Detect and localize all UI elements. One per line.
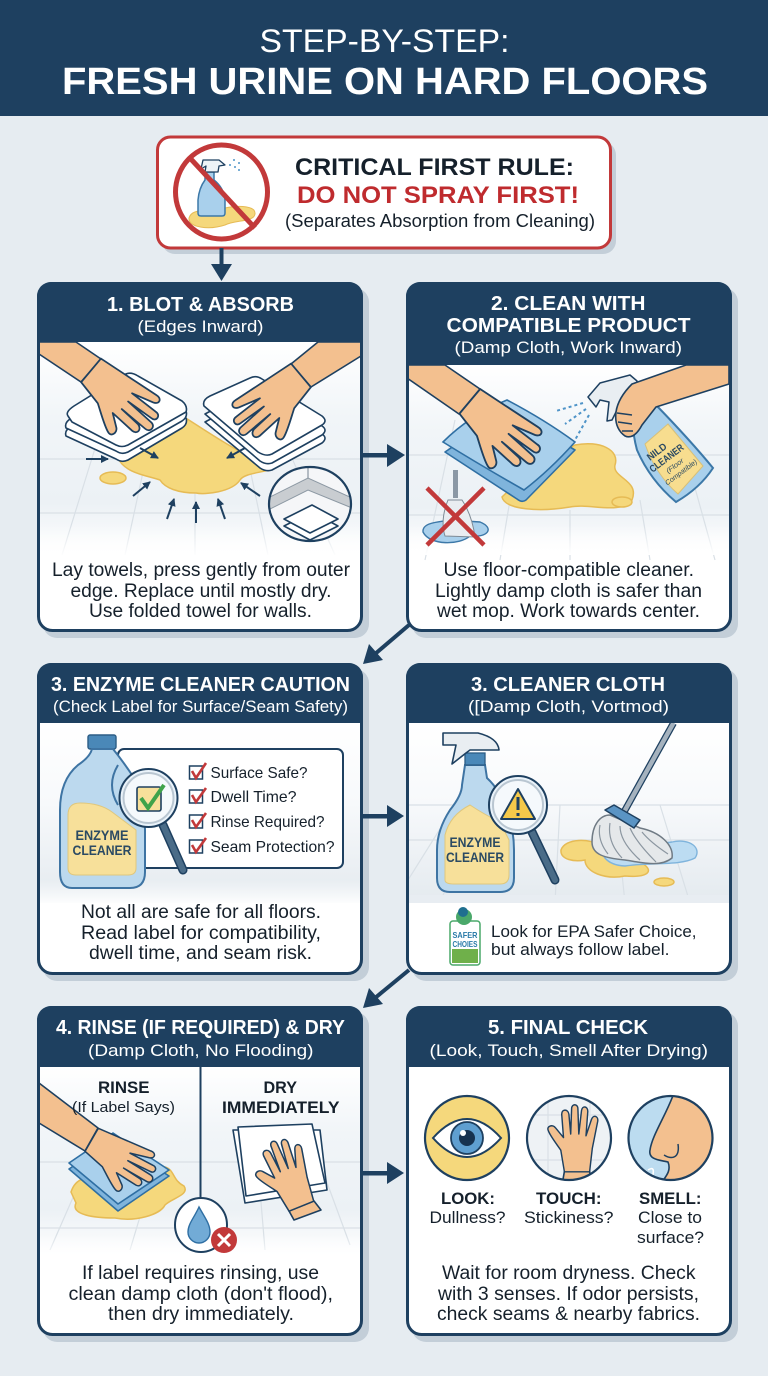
body text: Use folded towel for walls. (89, 601, 312, 622)
touch label (524, 1189, 614, 1227)
card background (43, 288, 369, 638)
floor background (39, 1067, 361, 1260)
panel: step 5 final check (406, 1006, 738, 1342)
note text (491, 922, 696, 959)
arrow: step 2 to step 3 (363, 625, 409, 664)
spray bottle: mild cleaner: NILD (645, 441, 669, 463)
smell label: surface? (637, 1228, 704, 1247)
enzyme cleaner jug: ENZYME (76, 827, 128, 843)
header (37, 282, 363, 342)
spray bottle: mild cleaner: (Floor (665, 457, 686, 475)
header: (Damp Cloth, No Flooding) (88, 1041, 314, 1060)
header (37, 1006, 363, 1067)
body text: with 3 senses. If odor persists, (437, 1284, 699, 1305)
arrow: cleaner cloth to step 4 (363, 970, 409, 1008)
header (37, 663, 363, 723)
arrow: step 4 to step 5 (363, 1162, 404, 1184)
smell label: Close to (638, 1208, 702, 1227)
checklist items: Dwell Time? (210, 789, 297, 806)
header: (Check Label for Surface/Seam Safety) (53, 697, 348, 716)
rinse label: RINSE (98, 1078, 150, 1097)
header: (Edges Inward) (138, 317, 264, 336)
rinse illustration (39, 1083, 185, 1219)
rinse label (72, 1078, 175, 1116)
header: 4. RINSE (IF REQUIRED) & DRY (56, 1017, 346, 1039)
card background (412, 288, 738, 638)
spray bottle: mild cleaner: Compatible) (664, 459, 699, 487)
illustration: bottle and mop (408, 723, 730, 903)
body text: Use floor-compatible cleaner. (444, 560, 694, 581)
callout: critical first rule: CRITICAL FIRST RULE: (295, 154, 574, 181)
smell label: SMELL: (639, 1189, 702, 1208)
card background (412, 669, 738, 981)
enzyme cleaner jug (60, 735, 145, 888)
header: (Look, Touch, Smell After Drying) (430, 1041, 708, 1060)
spray bottle: ENZYME (450, 834, 500, 850)
note text: but always follow label. (491, 940, 670, 959)
card background (412, 1012, 738, 1342)
icon: nose (627, 1094, 714, 1182)
panel: step 1 blot and absorb (37, 282, 369, 638)
icon: safer choice label (450, 907, 480, 965)
spray mist (556, 403, 589, 440)
title banner (0, 0, 768, 116)
callout: critical first rule (158, 137, 616, 254)
crossed-out wet mop (423, 470, 488, 545)
dry illustration (233, 1124, 327, 1220)
body text (68, 1263, 333, 1325)
icon: safer choice label: SAFER (452, 930, 478, 940)
arrow: step 3 to cleaner cloth (363, 805, 404, 827)
hand holding bottle (616, 365, 729, 437)
header: (Damp Cloth, Work Inward) (454, 338, 682, 357)
body text (435, 560, 702, 622)
arrow: step 1 to step 2 (363, 444, 405, 467)
mop (592, 723, 674, 864)
body text (437, 1263, 700, 1325)
look label (430, 1189, 506, 1227)
body text (81, 902, 321, 964)
header: ([Damp Cloth, Vortmod) (468, 697, 669, 716)
header: 3. ENZYME CLEANER CAUTION (51, 674, 350, 696)
body text: dwell time, and seam risk. (89, 943, 312, 964)
header (406, 663, 732, 723)
divider (200, 1067, 202, 1198)
body text: Lay towels, press gently from outer (52, 560, 351, 581)
body text: Read label for compatibility, (81, 923, 321, 944)
illustration: towels blotting puddle (39, 342, 361, 557)
panel: step 4 rinse and dry (37, 1006, 369, 1342)
dry label (222, 1078, 340, 1117)
panel: step 2 clean with compatible product (406, 282, 738, 638)
panel: step 3 enzyme cleaner caution (37, 663, 369, 981)
icon: touching hand (527, 1096, 611, 1185)
checklist items: Seam Protection? (210, 839, 335, 856)
body text (52, 560, 351, 622)
checklist items (190, 763, 335, 856)
inward arrows (86, 448, 260, 523)
card background (43, 1012, 369, 1342)
hand on cloth (407, 365, 553, 487)
spray bottle: mild cleaner (588, 375, 713, 502)
header (406, 1006, 732, 1067)
look label: Dullness? (430, 1208, 506, 1227)
title banner: STEP-BY-STEP: (260, 23, 510, 59)
header: 5. FINAL CHECK (488, 1017, 649, 1039)
card background (43, 669, 369, 981)
icon: eye (425, 1096, 509, 1180)
magnifier with green check (120, 769, 183, 870)
touch label: TOUCH: (536, 1189, 602, 1208)
panel: cleaner cloth (406, 663, 738, 981)
body text: If label requires rinsing, use (82, 1263, 319, 1284)
header: COMPATIBLE PRODUCT (446, 315, 690, 337)
left hand (39, 342, 170, 453)
body text: check seams & nearby fabrics. (437, 1304, 700, 1325)
note text: Look for EPA Safer Choice, (491, 922, 696, 941)
rinse label: (If Label Says) (72, 1099, 175, 1116)
body text: wet mop. Work towards center. (436, 601, 700, 622)
enzyme cleaner jug: CLEANER (72, 842, 132, 858)
arrow: rule to step 1 (211, 248, 232, 281)
inset: folded towel at wall (268, 460, 352, 541)
body text: Wait for room dryness. Check (442, 1263, 696, 1284)
body text: edge. Replace until mostly dry. (70, 581, 332, 602)
checklist items: Surface Safe? (210, 765, 308, 782)
body text: Lightly damp cloth is safer than (435, 581, 702, 602)
spray bottle: CLEANER (446, 849, 504, 865)
dry label: DRY (264, 1078, 298, 1097)
header: 3. CLEANER CLOTH (471, 674, 665, 696)
dry label: IMMEDIATELY (222, 1098, 340, 1117)
smell label (637, 1189, 704, 1247)
left towel stack (66, 373, 186, 461)
icon: water drop warning (175, 1198, 237, 1253)
soft floor background (39, 723, 361, 903)
magnifier with warning (489, 776, 555, 880)
touch label: Stickiness? (524, 1208, 614, 1227)
title banner: FRESH URINE ON HARD FLOORS (62, 61, 708, 103)
body text: clean damp cloth (don't flood), (68, 1284, 333, 1305)
illustration: cloth and spray (407, 365, 730, 560)
right hand (222, 342, 361, 458)
look label: LOOK: (441, 1189, 495, 1208)
header: 2. CLEAN WITH (491, 293, 646, 315)
header (406, 282, 732, 365)
spray bottle: mild cleaner: CLEANER (648, 442, 687, 475)
icon: safer choice label: CHOIES (452, 939, 478, 949)
puddles (561, 840, 697, 886)
right towel stack (204, 377, 325, 471)
checklist items: Rinse Required? (210, 814, 325, 831)
icon: no spray bottle (176, 145, 268, 239)
checklist card (118, 749, 343, 868)
spray bottle (437, 733, 514, 892)
callout: critical first rule: (Separates Absorption from Cleaning) (285, 211, 595, 231)
blue cloth (443, 400, 575, 501)
body text: Not all are safe for all floors. (81, 902, 321, 923)
callout: critical first rule: DO NOT SPRAY FIRST! (297, 182, 579, 209)
header: 1. BLOT & ABSORB (107, 294, 294, 316)
body text: then dry immediately. (108, 1304, 294, 1325)
